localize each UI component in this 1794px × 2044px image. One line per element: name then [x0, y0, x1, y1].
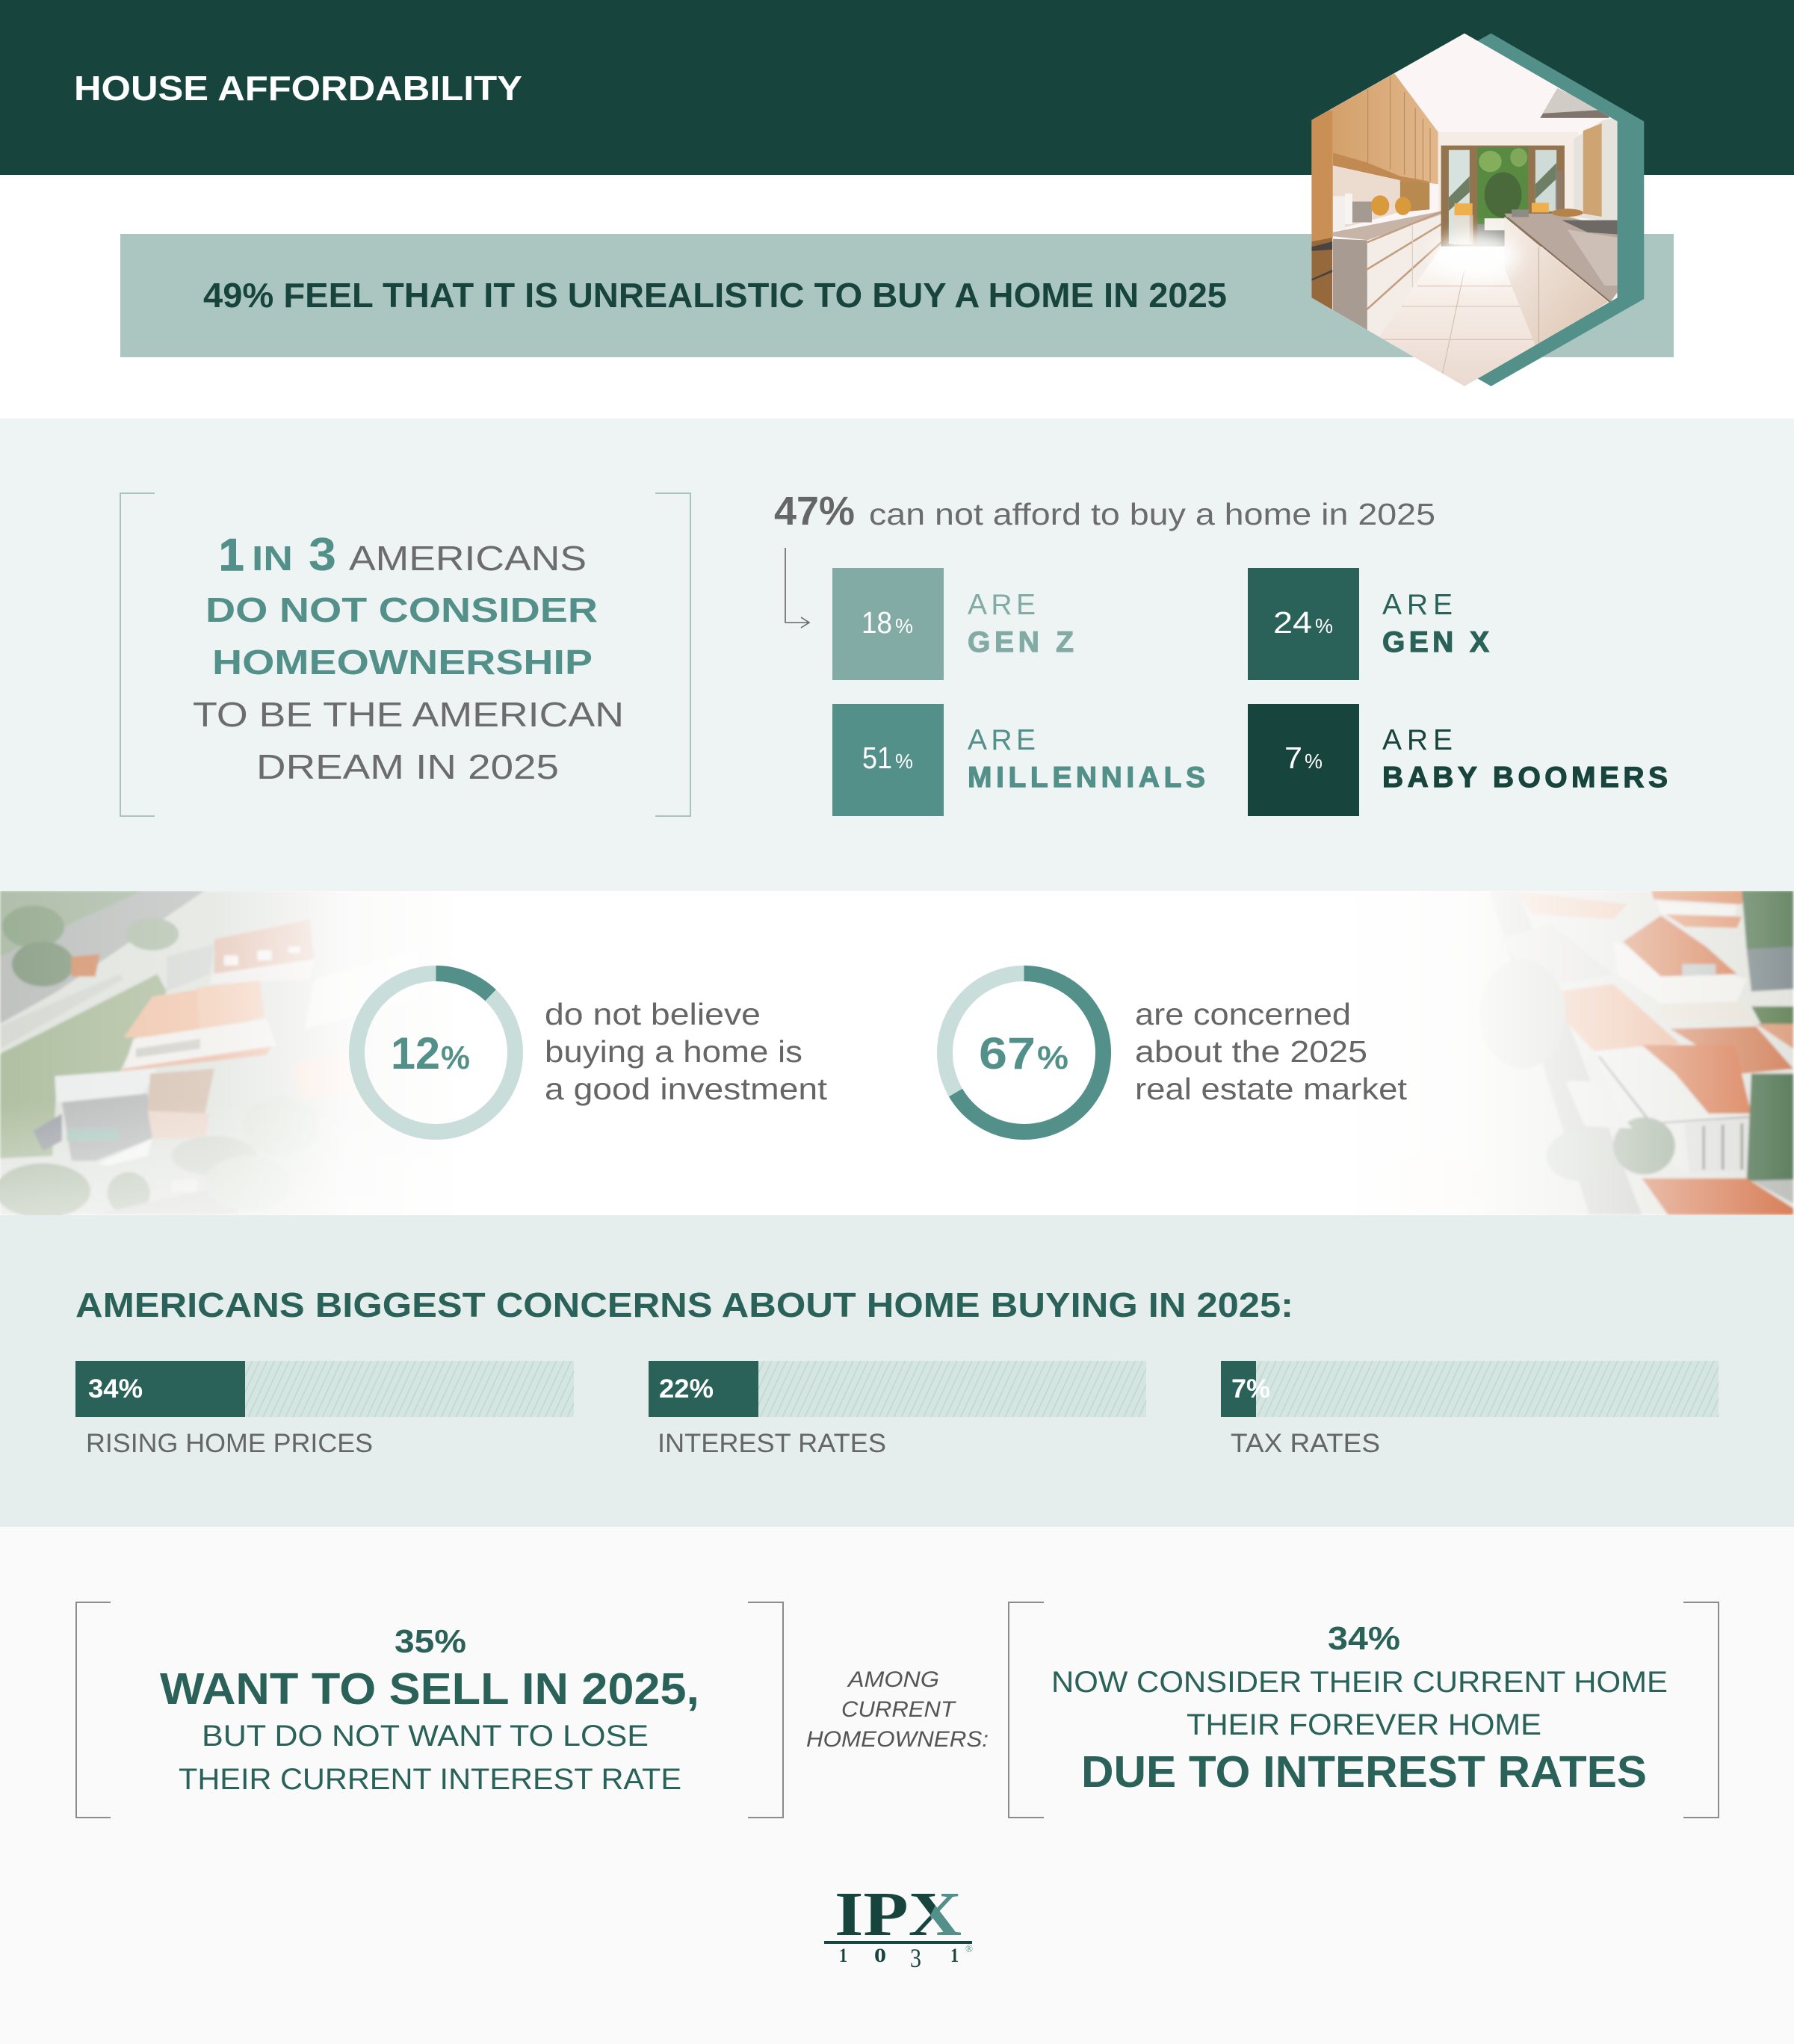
- logo: IPX 1031: 1: [839, 1945, 847, 1966]
- callout: want to sell: THEIR CURRENT INTEREST RATE: [179, 1763, 681, 1796]
- callout: forever home: [1009, 1602, 1719, 1818]
- stat: 47 percent: [774, 489, 1435, 534]
- headline text: 49% FEEL THAT IT IS UNREALISTIC TO BUY A HOME IN 2025: [203, 276, 1227, 315]
- generation: baby boomers: [1248, 704, 1668, 816]
- callout: want to sell: BUT DO NOT WANT TO LOSE: [202, 1720, 649, 1753]
- generation: baby boomers: ARE: [1382, 724, 1453, 756]
- donut: 67 percent: [944, 973, 1104, 1131]
- callout: forever home: DUE TO INTEREST RATES: [1081, 1747, 1647, 1797]
- logo: IPX 1031: 1: [950, 1945, 959, 1966]
- text: good investment: do not believe: [545, 997, 761, 1031]
- bracket panel: american dream: AMERICANS: [349, 539, 587, 578]
- panel: biggest concerns: [0, 1215, 1794, 1527]
- bar: tax rates: 7%: [1231, 1374, 1270, 1404]
- bracket panel: american dream: IN: [252, 539, 293, 578]
- generation: millennials: ARE: [968, 724, 1036, 756]
- donut: 67 percent: %: [1037, 1040, 1068, 1076]
- bracket panel: american dream: 3: [309, 529, 336, 581]
- stat: 47 percent: 47%: [774, 489, 855, 534]
- aerial photo: left: [0, 891, 342, 1215]
- hexagon kitchen photo: [1311, 34, 1644, 386]
- bar: rising home prices: RISING HOME PRICES: [86, 1429, 373, 1458]
- callout: forever home: THEIR FOREVER HOME: [1187, 1708, 1541, 1741]
- generation: baby boomers: BABY BOOMERS: [1382, 762, 1668, 794]
- text: good investment: a good investment: [545, 1072, 828, 1106]
- logo: IPX 1031: [824, 1894, 973, 1967]
- logo: IPX 1031: 3: [910, 1943, 921, 1973]
- logo: IPX 1031: ®: [965, 1944, 973, 1955]
- panel: headline band: [120, 234, 1674, 357]
- generation: baby boomers: 7: [1284, 741, 1302, 775]
- callout: want to sell: [76, 1602, 783, 1818]
- aerial photo: right: [1492, 891, 1794, 1215]
- bar: interest rates: INTEREST RATES: [658, 1429, 886, 1458]
- bracket panel: american dream: TO BE THE AMERICAN: [193, 695, 624, 734]
- bar: interest rates: 22%: [659, 1374, 714, 1404]
- bar: interest rates: [649, 1361, 1146, 1458]
- callout: want to sell: WANT TO SELL IN 2025,: [160, 1664, 699, 1714]
- panel: header: [0, 0, 1794, 175]
- callout: forever home: 34%: [1328, 1620, 1400, 1657]
- generation: gen x: %: [1315, 614, 1333, 637]
- generation: gen z: %: [895, 614, 913, 637]
- bar: rising home prices: 34%: [88, 1374, 143, 1404]
- generation: gen x: ARE: [1382, 589, 1453, 621]
- text: concerned about market: are concerned: [1135, 997, 1351, 1031]
- generation: baby boomers: %: [1305, 750, 1323, 773]
- arrow: [785, 548, 809, 628]
- logo: IPX 1031: IPX: [835, 1880, 962, 1949]
- generation: gen x: 24: [1273, 605, 1312, 640]
- panel: aerial neighbourhood photo band: [0, 891, 1794, 1218]
- generation: gen z: [832, 568, 1074, 680]
- logo: IPX 1031: IPX: [835, 1880, 962, 1949]
- generation: millennials: %: [895, 750, 913, 773]
- bracket panel: american dream: DO NOT CONSIDER: [205, 590, 598, 629]
- text: concerned about market: about the 2025: [1135, 1034, 1367, 1069]
- generation: gen z: 18: [862, 605, 892, 640]
- stat: 47 percent: can not afford to buy a home in 2025: [869, 497, 1435, 531]
- label: among current homeowners: CURRENT: [841, 1697, 957, 1722]
- bar: tax rates: TAX RATES: [1231, 1429, 1380, 1458]
- callout: forever home: NOW CONSIDER THEIR CURRENT HOME: [1051, 1666, 1668, 1699]
- generation: gen x: GEN X: [1382, 626, 1489, 658]
- label: among current homeowners: [806, 1667, 989, 1752]
- bracket panel: american dream: [120, 493, 690, 816]
- generation: gen x: [1248, 568, 1489, 680]
- generation: millennials: 51: [862, 741, 892, 775]
- text: good investment: [545, 997, 828, 1106]
- bar: rising home prices: [75, 1361, 574, 1458]
- generation: millennials: MILLENNIALS: [968, 762, 1205, 794]
- donut: 12 percent: %: [441, 1040, 470, 1076]
- bracket panel: american dream: 1: [219, 530, 244, 580]
- label: among current homeowners: HOMEOWNERS:: [806, 1727, 989, 1752]
- concerns heading: AMERICANS BIGGEST CONCERNS ABOUT HOME BUYING IN 2025:: [75, 1285, 1293, 1324]
- text: good investment: buying a home is: [545, 1034, 802, 1069]
- panel: americans stats: [0, 419, 1794, 891]
- donut: 12 percent: [357, 973, 516, 1131]
- bracket panel: american dream: HOMEOWNERSHIP: [212, 643, 593, 682]
- generation: millennials: [832, 704, 1205, 816]
- donut: 12 percent: 12: [391, 1028, 440, 1078]
- bar: tax rates: [1221, 1361, 1719, 1458]
- text: concerned about market: [1135, 997, 1408, 1106]
- text: concerned about market: real estate market: [1135, 1072, 1408, 1106]
- title: HOUSE AFFORDABILITY: [74, 69, 522, 108]
- generation: gen z: GEN Z: [968, 626, 1074, 658]
- generation: gen z: ARE: [968, 589, 1036, 621]
- label: among current homeowners: AMONG: [847, 1667, 939, 1692]
- donut: 67 percent: 67: [979, 1028, 1036, 1078]
- logo: IPX 1031: 0: [874, 1945, 886, 1966]
- callout: want to sell: 35%: [395, 1623, 466, 1660]
- bracket panel: american dream: DREAM IN 2025: [256, 747, 559, 786]
